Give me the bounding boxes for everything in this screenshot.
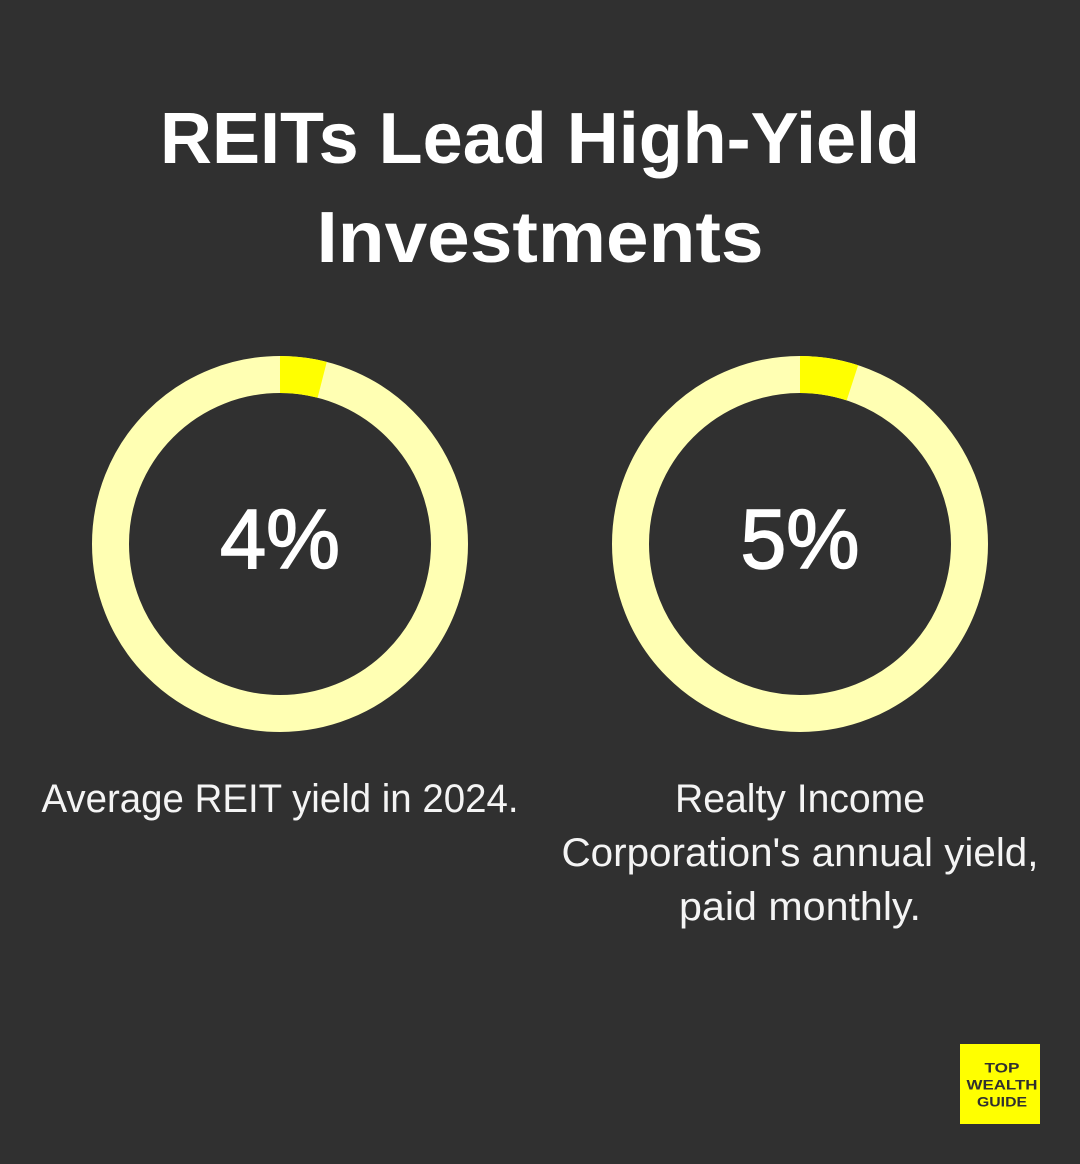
label: Realty Income yield: Realty Income [675, 777, 925, 821]
label: Realty Income yield [562, 777, 1038, 929]
logo: Top Wealth Guide [960, 1044, 1040, 1124]
logo: Top Wealth Guide: TOP [984, 1060, 1020, 1076]
label: Realty Income yield: paid monthly. [679, 885, 921, 929]
title: REITs Lead High-Yield [160, 99, 920, 179]
title: Investments [316, 198, 764, 278]
panel: average REIT yield [42, 374, 518, 821]
title [160, 99, 920, 278]
panel: Realty Income yield [562, 374, 1038, 929]
donut chart: 4% [110, 374, 450, 714]
logo: Top Wealth Guide: GUIDE [977, 1094, 1027, 1110]
logo: Top Wealth Guide: WEALTH [966, 1076, 1038, 1092]
label: Realty Income yield: Corporation's annual yield, [562, 831, 1038, 875]
donut chart: 5% [630, 374, 970, 714]
value: 5%: 5% [740, 492, 860, 586]
label: average REIT yield: Average REIT yield in 2024. [42, 777, 518, 821]
value: 4%: 4% [220, 492, 340, 586]
